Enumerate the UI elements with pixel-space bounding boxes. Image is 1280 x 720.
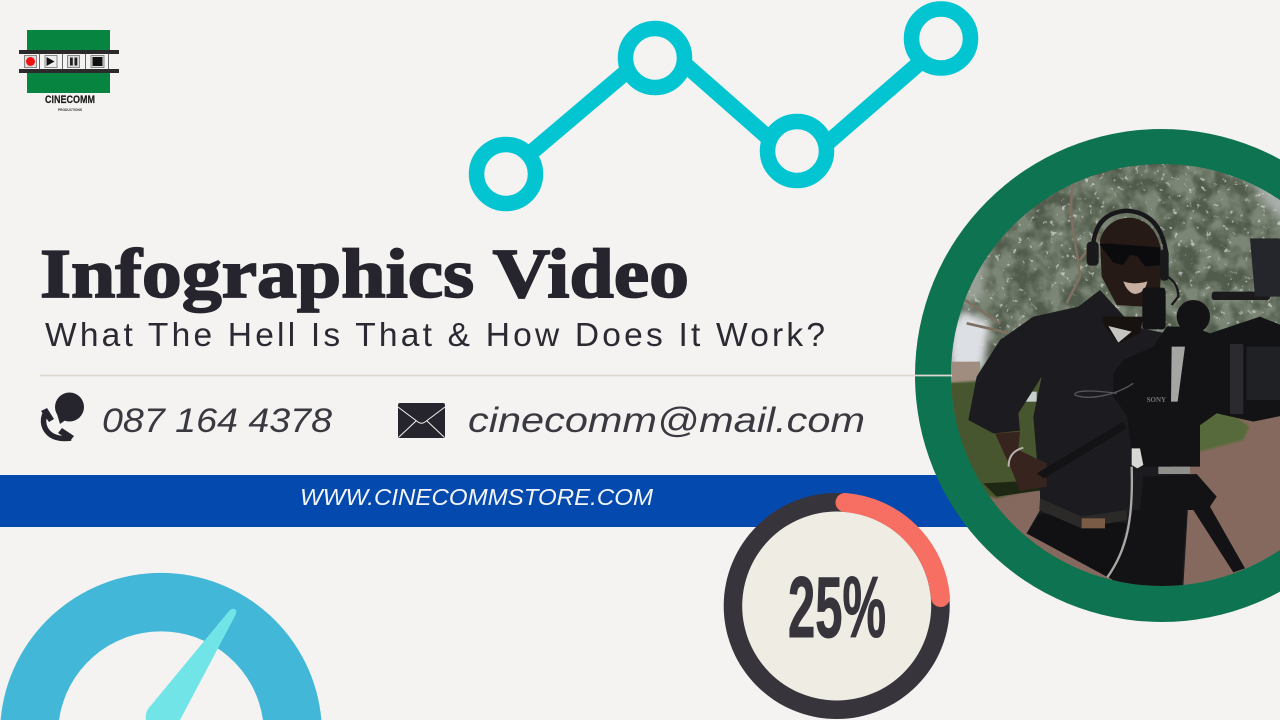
- line chart icon: [476, 9, 970, 204]
- divider line: [40, 374, 952, 376]
- ground and bushes: [943, 362, 1280, 593]
- phone number: 087 164 4378: [102, 402, 332, 440]
- percentage label: 25%: [788, 560, 886, 656]
- subtitle: What The Hell Is That & How Does It Work?: [45, 317, 825, 354]
- blue website band: [0, 475, 1000, 527]
- logo: Cinecomm Productions: CINECOMM: [45, 94, 95, 106]
- gauge arc: [1, 573, 321, 720]
- gauge needle: [146, 609, 236, 720]
- logo: Cinecomm Productions: PRODUCTIONS: [58, 107, 82, 112]
- progress arc: [845, 502, 940, 598]
- arm and hand: [995, 432, 1047, 491]
- logo: Cinecomm Productions: [19, 30, 119, 112]
- tree backdrop: [943, 160, 1280, 427]
- belt: [1039, 498, 1127, 528]
- donut chart 25%: [724, 493, 950, 719]
- head, headset and sunglasses: [1087, 211, 1178, 343]
- camera and tripod: SONY: [1147, 396, 1166, 404]
- website url: WWW.CINECOMMSTORE.COM: [300, 484, 654, 510]
- icon: phone with speech bubble: [41, 392, 84, 441]
- shirt and trousers: [968, 290, 1190, 587]
- title: Infographics Video: [40, 236, 689, 313]
- camera and tripod: [1037, 238, 1280, 587]
- gauge: [1, 573, 321, 720]
- email address: cinecomm@mail.com: [468, 401, 865, 440]
- portrait ring: [915, 129, 1280, 622]
- icon: envelope: [398, 403, 445, 438]
- photo: camera operator: [943, 160, 1280, 593]
